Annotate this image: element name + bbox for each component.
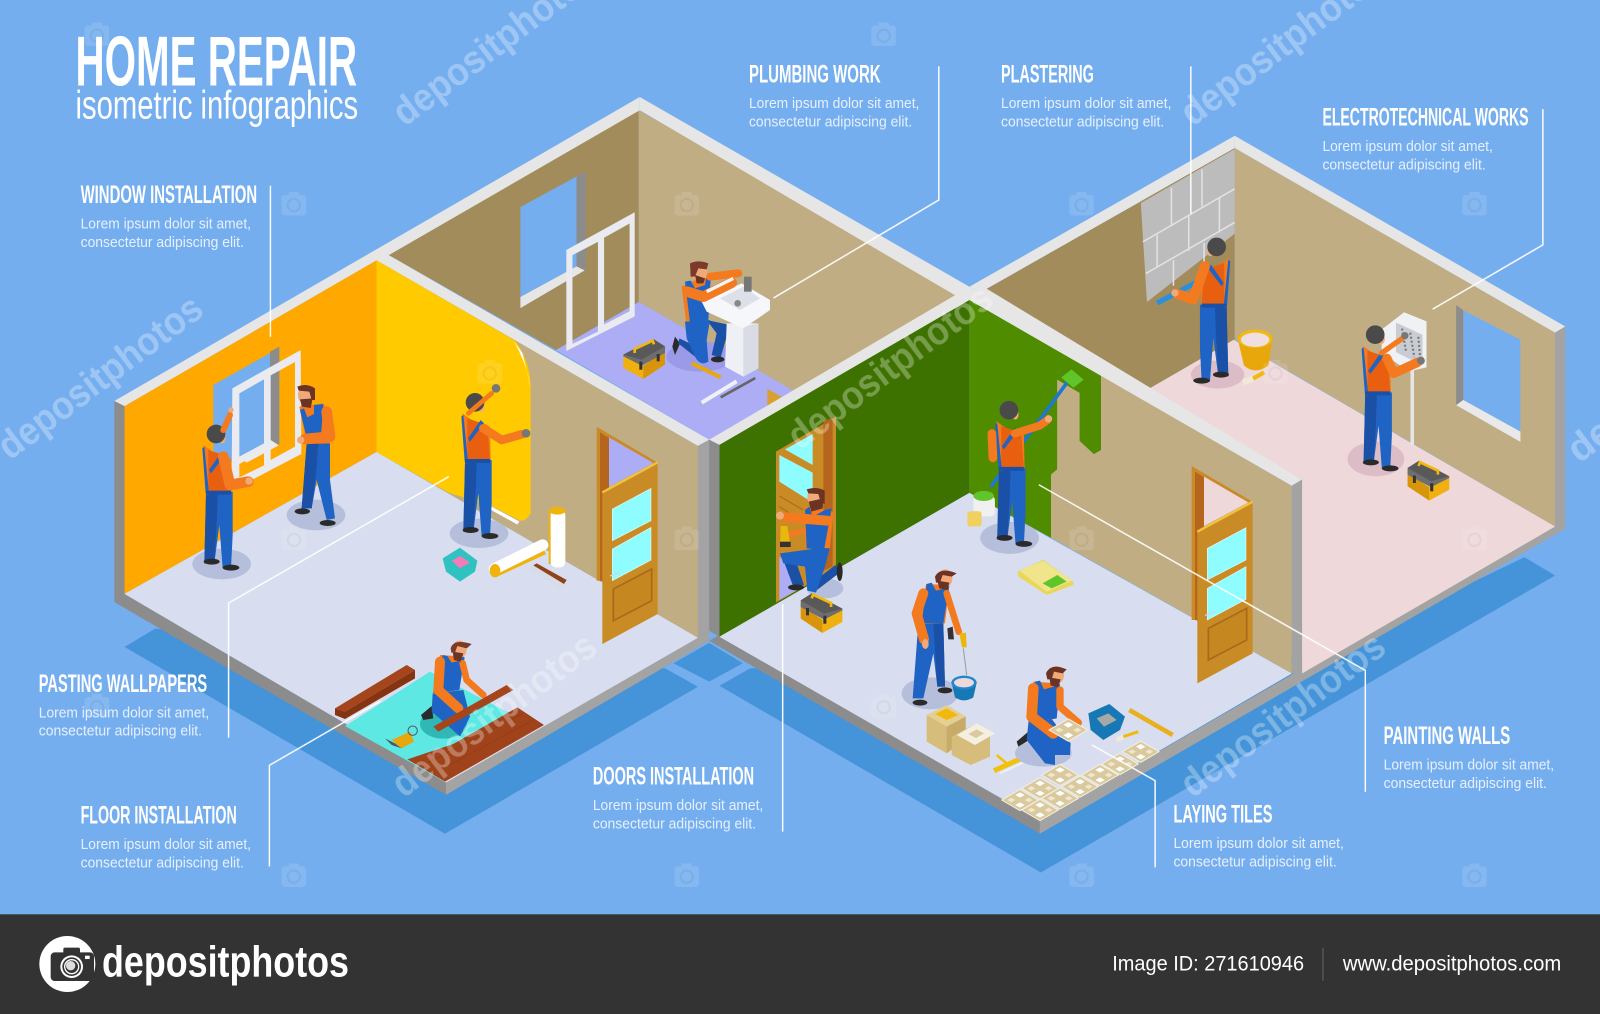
laid tiles bbox=[1002, 741, 1159, 821]
label: plumbing work bbox=[749, 61, 919, 131]
label: pasting wallpapers: consectetur adipiscing elit. bbox=[39, 724, 202, 740]
label: electrotechnical works: consectetur adipiscing elit. bbox=[1322, 157, 1486, 173]
side window bbox=[1456, 305, 1520, 442]
logo icon bbox=[39, 936, 95, 992]
floor worker bbox=[420, 641, 483, 739]
label: doors installation: consectetur adipiscing elit. bbox=[593, 817, 756, 833]
label: window installation: Lorem ipsum dolor sit amet, bbox=[81, 217, 251, 233]
label: doors installation bbox=[593, 763, 763, 833]
label: pasting wallpapers: Lorem ipsum dolor sit amet, bbox=[39, 705, 209, 721]
label: electrotechnical works: Lorem ipsum dolor sit amet, bbox=[1322, 139, 1493, 155]
toolbox bbox=[1408, 461, 1449, 501]
paste bucket bbox=[443, 548, 477, 582]
title: HOME REPAIR bbox=[76, 22, 357, 101]
paint cans bbox=[967, 491, 995, 527]
label: painting walls: PAINTING WALLS bbox=[1384, 722, 1510, 750]
door and door worker bbox=[776, 417, 843, 603]
label: laying tiles: consectetur adipiscing elit. bbox=[1173, 854, 1337, 870]
label: floor installation: FLOOR INSTALLATION bbox=[81, 801, 237, 829]
new window frame bbox=[566, 212, 635, 351]
plasterer bbox=[1171, 238, 1244, 389]
nailer bbox=[385, 726, 417, 748]
room: window and wallpapers bbox=[124, 260, 698, 783]
building bases bbox=[114, 516, 1565, 834]
tiling group bbox=[902, 569, 1173, 821]
room: plumbing bbox=[389, 110, 964, 446]
paint tray bbox=[1017, 560, 1073, 595]
label: floor installation bbox=[81, 801, 251, 871]
block wall bbox=[1141, 149, 1235, 302]
worker left bbox=[192, 407, 253, 579]
light green wall bbox=[969, 300, 1101, 538]
label: plumbing work: consectetur adipiscing elit. bbox=[749, 115, 912, 131]
door: wallpaper room bbox=[597, 427, 658, 644]
photo watermarks: depositphotos bbox=[780, 276, 1001, 458]
dark green wall bbox=[719, 300, 969, 637]
label: plastering: PLASTERING bbox=[1001, 61, 1094, 89]
label: plumbing work: PLUMBING WORK bbox=[749, 61, 881, 89]
wall ridges bbox=[114, 97, 1565, 486]
window frame bbox=[232, 350, 301, 489]
fuse box bbox=[1382, 312, 1427, 445]
label: laying tiles bbox=[1173, 800, 1344, 870]
rear right wall bbox=[639, 110, 964, 398]
orange wall bbox=[124, 260, 377, 594]
label: pasting wallpapers bbox=[39, 670, 209, 740]
floor bbox=[124, 452, 698, 783]
tile worker bbox=[1015, 666, 1088, 767]
label: window installation: consectetur adipiscing elit. bbox=[81, 235, 244, 251]
label: floor installation: Lorem ipsum dolor sit amet, bbox=[81, 837, 251, 853]
rear left wall bbox=[389, 110, 639, 350]
label: electrotechnical works bbox=[1322, 104, 1529, 173]
photo watermarks bbox=[0, 0, 1600, 806]
label: floor installation: consectetur adipiscing elit. bbox=[81, 855, 244, 871]
label: window installation bbox=[81, 181, 257, 251]
camera watermarks bbox=[85, 22, 1487, 887]
label: window installation: WINDOW INSTALLATION bbox=[81, 181, 257, 209]
floor install area bbox=[335, 641, 544, 782]
label: plastering: Lorem ipsum dolor sit amet, bbox=[1001, 96, 1171, 112]
brush bbox=[1117, 732, 1138, 740]
title bbox=[76, 22, 358, 127]
pink floor bbox=[1149, 340, 1555, 673]
worker right bbox=[287, 385, 345, 530]
door worker bbox=[776, 488, 843, 598]
door: painting room bbox=[1192, 466, 1253, 683]
paste bucket and wallpaper rolls bbox=[443, 507, 567, 588]
door frame bbox=[776, 417, 836, 603]
window and two workers bbox=[192, 347, 345, 579]
wallpaper worker bbox=[450, 384, 530, 548]
wrench and pipes bbox=[692, 363, 755, 403]
tan wall bbox=[1051, 376, 1292, 673]
label: plastering: consectetur adipiscing elit. bbox=[1001, 115, 1164, 131]
image id: Image ID: 271610946 bbox=[1112, 952, 1304, 975]
label: painting walls: Lorem ipsum dolor sit amet, bbox=[1384, 757, 1554, 773]
window opening bbox=[213, 347, 279, 473]
room: plastering and electrics bbox=[987, 148, 1555, 673]
leader lines bbox=[229, 66, 1543, 867]
paint roller pole bbox=[991, 377, 1071, 487]
label: doors installation: Lorem ipsum dolor sit amet, bbox=[593, 798, 763, 814]
footer bar bbox=[0, 914, 1600, 1014]
spirit level bbox=[1129, 710, 1173, 735]
label: laying tiles: Lorem ipsum dolor sit amet, bbox=[1173, 836, 1344, 852]
rear left wall bbox=[987, 148, 1235, 389]
door corner bbox=[767, 389, 784, 407]
laid planks bbox=[407, 707, 544, 782]
lavender floor bbox=[556, 302, 806, 446]
logo wordmark: depositphotos bbox=[102, 938, 349, 987]
label: painting walls: consectetur adipiscing elit. bbox=[1384, 776, 1547, 792]
label: painting walls bbox=[1384, 722, 1554, 792]
lying roll bbox=[490, 545, 543, 577]
toolbox bbox=[801, 593, 842, 633]
toolbox bbox=[623, 339, 665, 379]
loose plank bbox=[335, 665, 415, 719]
tile boxes bbox=[927, 705, 995, 765]
label: plastering bbox=[1001, 61, 1171, 131]
label: pasting wallpapers: PASTING WALLPAPERS bbox=[39, 670, 207, 698]
wall end caps bbox=[114, 327, 1565, 673]
held plank bbox=[433, 685, 513, 732]
wallpaper curl bbox=[490, 342, 531, 525]
floor bbox=[719, 493, 1292, 820]
label: doors installation: DOORS INSTALLATION bbox=[593, 763, 754, 791]
label: laying tiles: LAYING TILES bbox=[1173, 800, 1272, 828]
bucket bbox=[1238, 330, 1272, 370]
plumber at sink bbox=[667, 261, 770, 377]
window opening bbox=[520, 171, 586, 308]
photo watermarks: depositphotos bbox=[1172, 624, 1394, 806]
teal underlay bbox=[345, 672, 517, 782]
floor shadows bbox=[124, 557, 1555, 872]
drill and bucket bbox=[947, 627, 977, 700]
brush bbox=[1243, 372, 1264, 383]
divider bbox=[1322, 948, 1323, 981]
plaster trowel bbox=[1157, 279, 1203, 303]
upright roll bbox=[549, 507, 565, 567]
website: www.depositphotos.com bbox=[1342, 952, 1561, 975]
painter bbox=[980, 401, 1052, 554]
yellow wall bbox=[377, 260, 531, 521]
label: plumbing work: Lorem ipsum dolor sit amet, bbox=[749, 96, 919, 112]
roller bbox=[1061, 369, 1084, 388]
smoothing tool bbox=[529, 563, 567, 588]
room: doors, painting, tiles bbox=[719, 300, 1292, 821]
trowel bbox=[994, 755, 1032, 773]
title: isometric infographics bbox=[76, 83, 358, 127]
mixer worker bbox=[902, 569, 959, 709]
rear right wall bbox=[1235, 148, 1555, 527]
mortar bucket bbox=[1088, 704, 1125, 740]
tan wall bbox=[377, 260, 698, 638]
photo watermarks: depositphotos bbox=[384, 624, 605, 806]
electrician bbox=[1348, 325, 1425, 476]
